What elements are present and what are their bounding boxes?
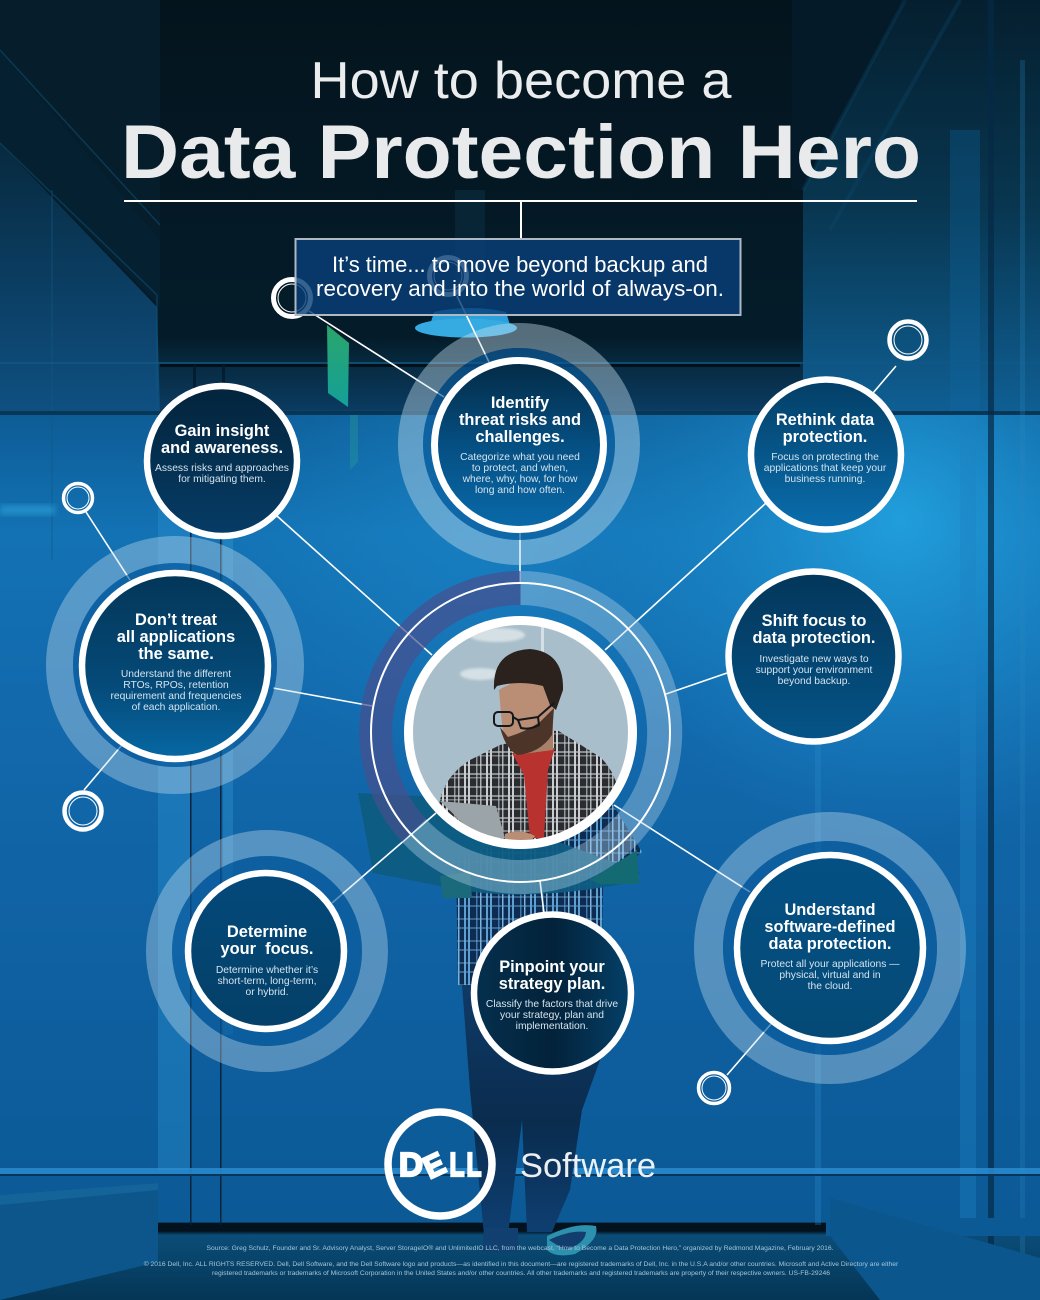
connector lines bbox=[84, 296, 896, 1075]
description: Categorize what you need bbox=[460, 452, 580, 463]
outer translucent ring, purple half bbox=[359, 571, 520, 842]
logo wordmark bbox=[399, 1145, 482, 1186]
panel: gain insight: Gain insight bbox=[175, 422, 270, 440]
panel: determine your focus: your focus. bbox=[221, 940, 313, 958]
panel: rethink data protection: protection. bbox=[783, 428, 867, 446]
panel: understand software-defined data protection bbox=[708, 826, 952, 1070]
panel: shift focus: Investigate new ways to bbox=[759, 654, 869, 665]
logo wordmark: D bbox=[399, 1146, 423, 1183]
disc bbox=[434, 360, 604, 530]
exit sign bbox=[327, 325, 349, 407]
thin white ring bbox=[371, 583, 670, 882]
upper right wall bbox=[803, 0, 1040, 412]
logo wordmark: L bbox=[450, 1146, 464, 1183]
panel: understand software-defined data protection: physical, virtual and in bbox=[779, 970, 881, 981]
footer: source and legal text bbox=[144, 1244, 899, 1277]
panel: pinpoint strategy plan: your strategy, plan and bbox=[500, 1010, 604, 1021]
callout: It's time bbox=[296, 239, 740, 315]
logo wordmark: L bbox=[466, 1146, 482, 1183]
panel: identify threat risks bbox=[410, 336, 628, 552]
panel: identify threat risks: challenges. bbox=[475, 428, 565, 446]
callout: It's time: It’s time... to move beyond backup and bbox=[332, 252, 708, 277]
panel: don't treat all applications the same bbox=[60, 550, 290, 780]
panel: identify threat risks: long and how often. bbox=[475, 485, 565, 496]
panel: understand software-defined data protection: Understand bbox=[784, 901, 876, 919]
node: top-left small ring bbox=[274, 280, 310, 316]
panel: understand software-defined data protection: Protect all your applications — bbox=[760, 959, 900, 970]
ceiling light bbox=[455, 190, 485, 305]
title line 1: How to become a bbox=[310, 52, 732, 110]
panel: rethink data protection: Focus on protecting the bbox=[771, 452, 879, 463]
shoes bbox=[547, 1225, 597, 1255]
outer translucent ring, light half bbox=[402, 571, 682, 894]
panel: gain insight: for mitigating them. bbox=[178, 474, 266, 485]
panel: rethink data protection: Rethink data bbox=[776, 411, 875, 429]
panel: identify threat risks: threat risks and bbox=[459, 411, 581, 429]
photo of man with laptop bbox=[413, 625, 628, 840]
panel: don't treat all applications the same: Understand the different bbox=[121, 669, 231, 680]
central hero: photo with rings bbox=[359, 571, 682, 894]
title line 2: Data Protection Hero bbox=[121, 110, 921, 195]
title bbox=[121, 52, 921, 195]
panel: determine your focus: Determine bbox=[227, 923, 307, 941]
panel: shift focus: data protection. bbox=[753, 629, 875, 647]
node: top-right small ring bbox=[890, 322, 926, 358]
panel: don't treat all applications the same: the same. bbox=[138, 645, 214, 663]
panel: gain insight: and awareness. bbox=[161, 439, 283, 457]
panel: determine your focus bbox=[159, 843, 375, 1059]
white photo border bbox=[408, 620, 632, 844]
panel: pinpoint strategy plan bbox=[474, 914, 631, 1072]
floor and door bases bbox=[0, 1183, 158, 1300]
panel: shift focus: beyond backup. bbox=[778, 676, 850, 687]
node: left upper small ring bbox=[64, 484, 92, 512]
title rule and stem bbox=[124, 201, 917, 239]
panel: don't treat all applications the same: all applications bbox=[117, 628, 235, 646]
panel: shift focus bbox=[728, 572, 898, 742]
panel: don't treat all applications the same: Don’t treat bbox=[135, 611, 218, 629]
halo ring bbox=[410, 336, 628, 552]
panel: don't treat all applications the same: RTOs, RPOs, retention bbox=[123, 680, 229, 691]
panel: rethink data protection: applications that keep your bbox=[764, 463, 887, 474]
panel: shift focus: Shift focus to bbox=[762, 612, 866, 630]
panel: understand software-defined data protection: data protection. bbox=[769, 935, 891, 953]
panel: rethink data protection: business running. bbox=[785, 474, 865, 485]
footer: source and legal text: © 2016 Dell, Inc. ALL RIGHTS RESERVED. Dell, Dell Software, and the Dell Software logo and products—as identified in this document—are registered trademarks of Dell, Inc. in the U.S.A and/or other countries. Microsoft and Active Directory are either bbox=[144, 1260, 899, 1268]
person silhouette: legs and laptop behind the graphic bbox=[358, 793, 642, 1255]
panel: don't treat all applications the same: requirement and frequencies bbox=[110, 691, 242, 702]
glasses bbox=[494, 703, 554, 729]
heading: Identify bbox=[491, 394, 550, 412]
callout: It's time: recovery and into the world of always-on. bbox=[316, 276, 724, 301]
light stripe left bbox=[0, 505, 55, 515]
panel: pinpoint strategy plan: Pinpoint your bbox=[499, 958, 605, 976]
panel: understand software-defined data protection: the cloud. bbox=[808, 981, 852, 992]
panel: determine your focus: Determine whether it’s bbox=[216, 965, 318, 976]
software label: Software bbox=[520, 1147, 656, 1185]
logo wordmark: E bbox=[418, 1145, 451, 1186]
footer: source and legal text: registered trademarks or trademarks of Microsoft Corporation in the United States and/or other countries. All other trademarks and registered trademarks are property of their respective owners. US-FB-29246 bbox=[212, 1270, 830, 1277]
node: left lower small ring bbox=[64, 792, 102, 830]
panel: determine your focus: short-term, long-term, bbox=[218, 976, 316, 987]
panel: understand software-defined data protection: software-defined bbox=[764, 918, 896, 936]
panel: shift focus: support your environment bbox=[756, 665, 873, 676]
window rail bbox=[0, 1168, 1040, 1174]
panel: gain insight bbox=[147, 386, 297, 536]
node: bottom-right small ring bbox=[698, 1072, 730, 1104]
panel: rethink data protection bbox=[751, 380, 901, 530]
panel: pinpoint strategy plan: implementation. bbox=[516, 1021, 588, 1032]
logo ring bbox=[388, 1112, 492, 1216]
logo: Dell Software bbox=[388, 1112, 656, 1216]
panel: don't treat all applications the same: of each application. bbox=[132, 702, 220, 713]
panel: pinpoint strategy plan: strategy plan. bbox=[499, 975, 605, 993]
upper left wall bbox=[0, 0, 160, 240]
inner band bbox=[423, 348, 615, 540]
panel: gain insight: Assess risks and approaches bbox=[155, 463, 289, 474]
panel: pinpoint strategy plan: Classify the factors that drive bbox=[486, 999, 618, 1010]
footer: source and legal text: Source: Greg Schulz, Founder and Sr. Advisory Analyst, Server StorageIO® and UnlimitedIO LLC, from the webcast, “How to Become a Data Protection Hero,” organized by Redmond Magazine, February 2016. bbox=[206, 1244, 834, 1252]
panel: identify threat risks: to protect, and when, bbox=[472, 463, 568, 474]
node: top-center small ring bbox=[430, 258, 466, 294]
panel: determine your focus: or hybrid. bbox=[246, 987, 288, 998]
panel: identify threat risks: where, why, how, for how bbox=[462, 474, 578, 485]
pillars bbox=[158, 415, 190, 1170]
